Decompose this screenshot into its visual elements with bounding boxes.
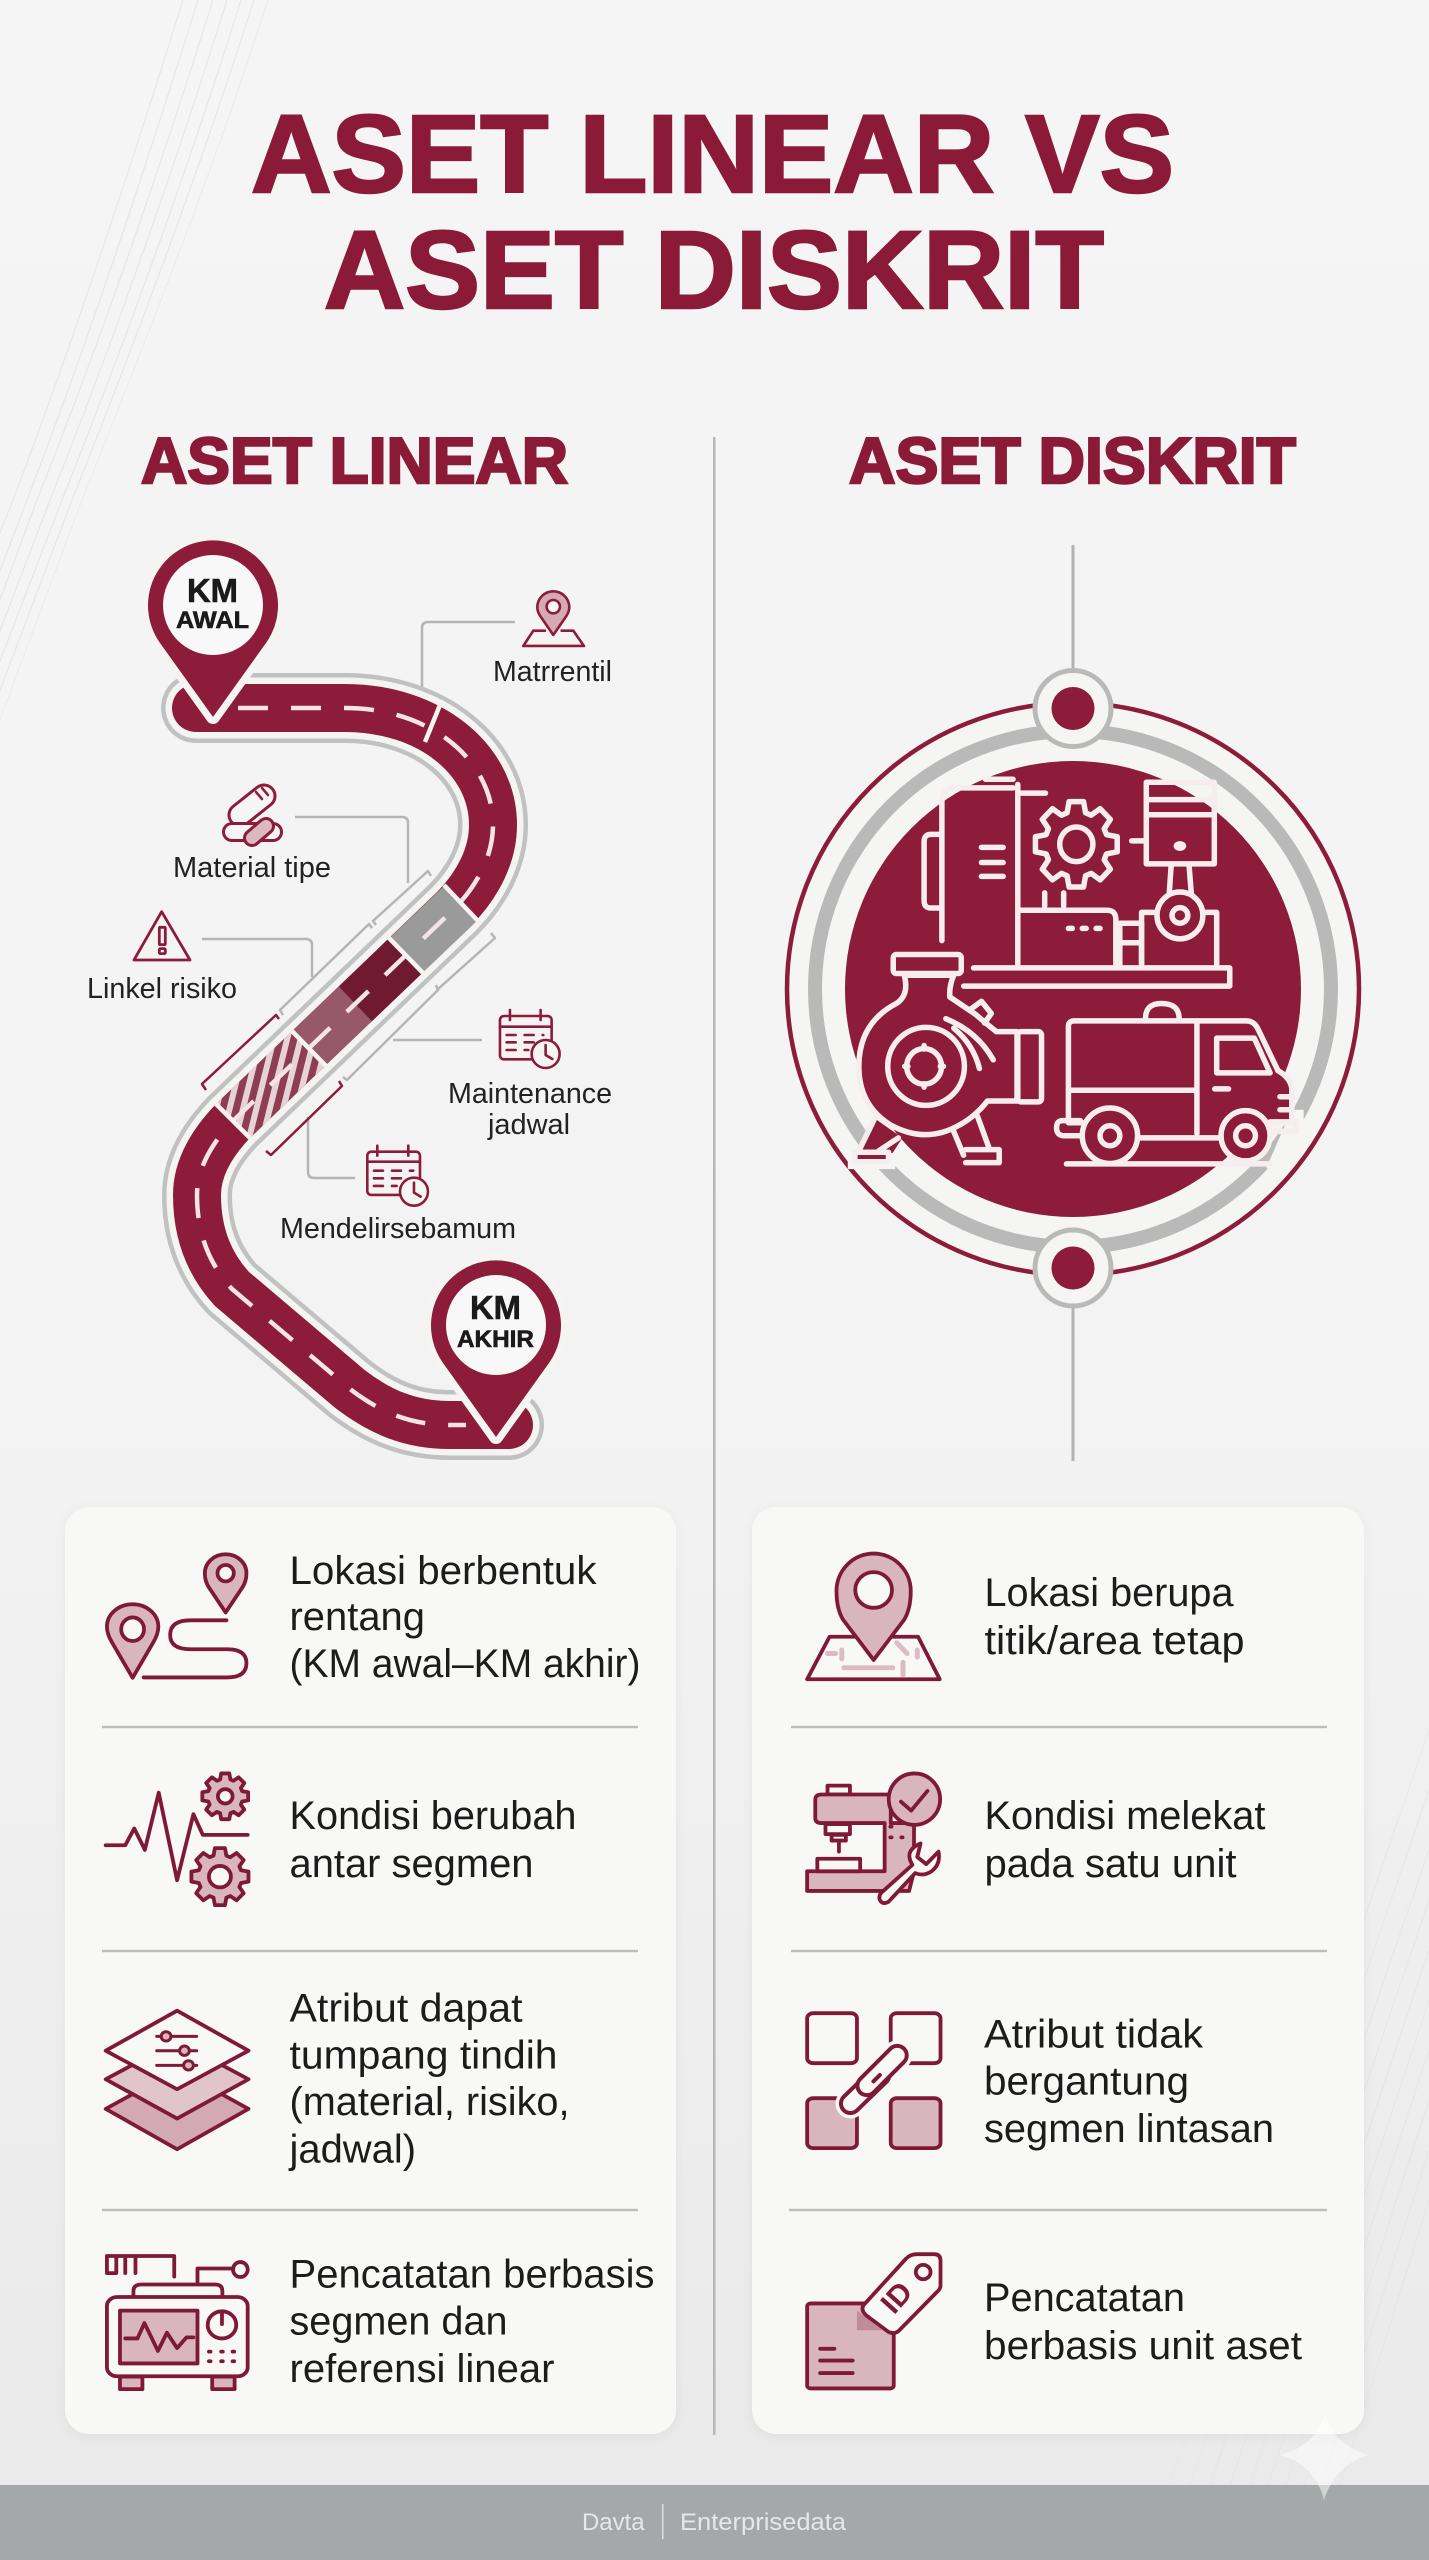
- icon: linked squares: [807, 2013, 941, 2148]
- icon: material: [232, 788, 273, 838]
- text: lokasi rentang: [290, 1549, 640, 1686]
- footer bar: Davta: [582, 2509, 645, 2536]
- label: maintenance jadwal: [448, 1078, 612, 1141]
- text: kondisi berubah: [290, 1794, 576, 1886]
- icon: van: [1057, 1003, 1297, 1164]
- title: ASET DISKRIT: [324, 209, 1104, 332]
- icon: machines: [855, 779, 1297, 1164]
- text: pencatatan unit: berbasis unit aset: [984, 2324, 1302, 2368]
- icon: gear: [1035, 802, 1117, 887]
- icon: machine and wrench: [807, 1773, 940, 1903]
- text: atribut tumpang tindih: tumpang tindih: [290, 2034, 558, 2078]
- text: lokasi rentang: Lokasi berbentuk: [290, 1549, 597, 1593]
- text: atribut tumpang tindih: [289, 1986, 570, 2172]
- icon: warning triangle: [134, 912, 190, 960]
- icon: calendar maintenance: [500, 1010, 560, 1068]
- footer bar: Enterprisedata: [680, 2509, 847, 2536]
- center divider: [713, 437, 716, 2435]
- label: mendelirsebamum: Mendelirsebamum: [280, 1213, 516, 1245]
- heading: aset diskrit: ASET DISKRIT: [849, 424, 1296, 497]
- text: atribut tidak bergantung: segmen lintasan: [984, 2107, 1274, 2151]
- text: lokasi rentang: (KM awal–KM akhir): [290, 1642, 640, 1686]
- pin: km akhir: AKHIR: [457, 1326, 534, 1353]
- icon: pin on map: [807, 1554, 940, 1679]
- label: material tipe: Material tipe: [173, 852, 331, 884]
- segment brackets: [202, 871, 495, 1155]
- text: kondisi berubah: Kondisi berubah: [290, 1794, 576, 1838]
- text: atribut tumpang tindih: jadwal): [289, 2128, 416, 2172]
- road: [196, 708, 509, 1425]
- text: lokasi rentang: rentang: [290, 1595, 425, 1639]
- panel: road diagram: [87, 540, 612, 1437]
- text: kondisi melekat: pada satu unit: [984, 1842, 1236, 1886]
- text: pencatatan unit: [984, 2276, 1302, 2368]
- label: maintenance jadwal: Maintenance: [448, 1078, 612, 1110]
- heading: aset linear: ASET LINEAR: [141, 424, 568, 497]
- pin: km akhir: [431, 1260, 561, 1437]
- node: bottom: [1035, 1230, 1111, 1306]
- pin: km akhir: KM: [470, 1289, 521, 1326]
- icon: control box: [964, 893, 1230, 986]
- text: atribut tidak bergantung: Atribut tidak: [984, 2012, 1204, 2056]
- panel: discrete asset emblem: [787, 670, 1359, 1306]
- text: pencatatan segmen: Pencatatan berbasis: [290, 2252, 654, 2296]
- text: atribut tidak bergantung: [984, 2012, 1274, 2151]
- icon: cabinet: [924, 779, 1045, 964]
- footer bar: [0, 2485, 1429, 2560]
- icon: route between pins: [107, 1554, 246, 1678]
- icon: stacked layers: [106, 2011, 248, 2149]
- text: pencatatan segmen: segmen dan: [290, 2300, 508, 2344]
- decorative star: [1280, 2411, 1369, 2500]
- icon: piston: [1132, 782, 1217, 964]
- text: kondisi berubah: antar segmen: [290, 1842, 534, 1886]
- title: ASET LINEAR VS: [251, 93, 1174, 216]
- node: top: [1035, 670, 1111, 746]
- title: [251, 93, 1174, 332]
- vertical connector lines: [1072, 545, 1074, 1461]
- road segments: [233, 903, 461, 1121]
- text: lokasi tetap: Lokasi berupa: [984, 1571, 1234, 1615]
- panel: linear asset characteristics: [65, 1507, 676, 2434]
- pin: km awal: KM: [187, 572, 238, 609]
- text: kondisi melekat: [984, 1794, 1266, 1886]
- icon: monitoring device: [107, 2256, 248, 2389]
- text: atribut tumpang tindih: Atribut dapat: [290, 1986, 522, 2030]
- road centre dashes: [197, 708, 493, 1425]
- text: atribut tumpang tindih: (material, risiko,: [290, 2080, 570, 2124]
- text: lokasi tetap: [984, 1571, 1244, 1663]
- label: maintenance jadwal: jadwal: [487, 1109, 570, 1141]
- text: lokasi tetap: titik/area tetap: [984, 1619, 1244, 1663]
- icon: map pin label: [523, 591, 584, 646]
- icon: document with id tag: ID: [875, 2276, 919, 2320]
- text: pencatatan segmen: referensi linear: [290, 2347, 554, 2391]
- icon: pulse and gears: [106, 1773, 248, 1905]
- icon: pump: [855, 954, 1042, 1163]
- text: pencatatan unit: Pencatatan: [984, 2276, 1185, 2320]
- icon: calendar mendelir: [367, 1146, 428, 1206]
- text: pencatatan segmen: [290, 2252, 654, 2391]
- pin: km awal: [148, 540, 278, 717]
- icon: document with id tag: [807, 2254, 941, 2388]
- label: linkel risiko: Linkel risiko: [87, 973, 237, 1005]
- pin: km awal: AWAL: [176, 607, 249, 634]
- label: matrrentil: Matrrentil: [493, 656, 612, 688]
- panel: discrete asset characteristics: [752, 1507, 1364, 2434]
- text: atribut tidak bergantung: bergantung: [984, 2060, 1189, 2104]
- text: kondisi melekat: Kondisi melekat: [984, 1794, 1266, 1838]
